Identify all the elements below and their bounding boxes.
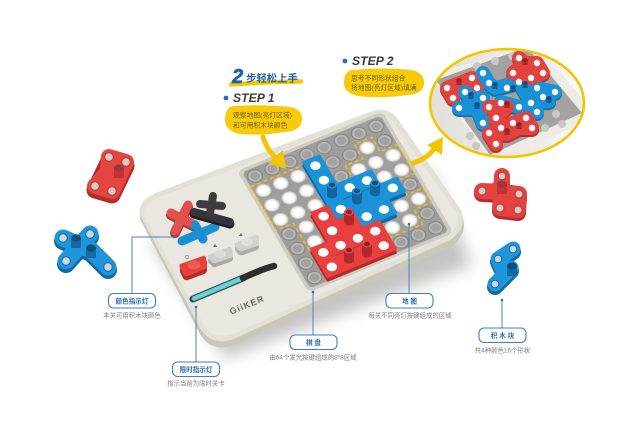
loose piece: blue left: [59, 230, 112, 271]
step 1 description bubble: [225, 105, 302, 135]
callout: time limit indicator: 限时指示灯: [180, 365, 213, 374]
step 2 description bubble: 将地图(亮灯区域)填满: [351, 83, 417, 92]
callout: color indicator: 颜色指示灯: [116, 296, 149, 305]
blue pieces on board: [304, 135, 413, 237]
red pieces on board: [295, 192, 395, 280]
loose piece: red top-left: [91, 153, 130, 195]
callout: time limit indicator: [167, 306, 225, 388]
step 2 description bubble: [344, 68, 424, 97]
map outline: dashed yellow: [251, 130, 448, 288]
step 2 description bubble: 思考不同形状组合: [351, 74, 406, 82]
step 1 description bubble: 观察地图(亮灯区域): [233, 110, 292, 120]
pegs: [327, 179, 380, 264]
callout: blocks: [475, 299, 531, 354]
callout: map: 每关不同亮灯按键组成的区域: [368, 310, 452, 320]
button: red: [180, 256, 207, 280]
loose piece: red right: [478, 172, 523, 214]
step 2 label: STEP 2: [352, 54, 394, 68]
button: grey right: [234, 235, 259, 255]
heading: 2 steps: [231, 66, 301, 88]
callout: color indicator: [103, 236, 175, 320]
callout: blocks: 共4种颜色16个形状: [475, 346, 531, 354]
step 1 label: STEP 1: [233, 91, 275, 105]
step 1 description bubble: 和可用积木块颜色: [233, 120, 288, 130]
arrow: board to inset: [413, 137, 443, 163]
inset: zoomed solved board: [428, 48, 586, 158]
heading: 2 steps: 步轻松上手: [246, 72, 298, 85]
button: grey left: [208, 247, 233, 267]
callout: color indicator: 本关可用积木块颜色: [103, 310, 161, 320]
logo: GiiKER: GiiKER: [228, 293, 266, 317]
time limit indicator bar: [193, 266, 274, 299]
arrow: step 1 to board: [263, 137, 286, 169]
game board: [237, 111, 454, 293]
callout: board: [269, 291, 357, 362]
callout: board: 棋 盘: [306, 338, 321, 347]
device: console body: [140, 110, 472, 358]
callout: board: 由64个发光按键组成的8*8区域: [269, 352, 357, 362]
heading: 2 steps: 2: [231, 66, 243, 88]
loose piece: blue right: [491, 245, 517, 288]
callout: map: [368, 223, 452, 320]
control buttons: [180, 233, 259, 280]
callout: map: 地 图: [402, 296, 417, 305]
callout: blocks: 积 木 块: [491, 331, 515, 340]
color indicator light: [171, 196, 230, 241]
callout: time limit indicator: 指示当前为限时关卡: [167, 378, 225, 388]
